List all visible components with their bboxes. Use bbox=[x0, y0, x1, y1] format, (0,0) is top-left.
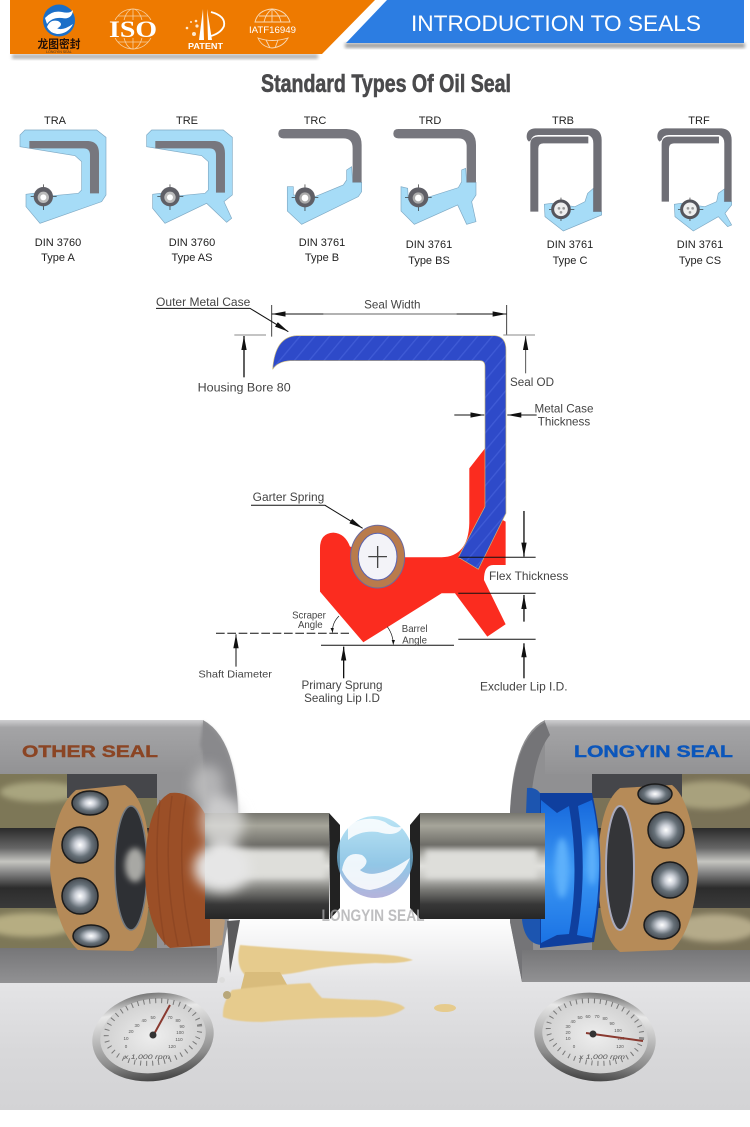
gauge: Longyin seal: 10 bbox=[565, 1036, 571, 1041]
diagram labels bbox=[156, 296, 593, 705]
gauge: other seal: 0 bbox=[125, 1044, 128, 1049]
gauge: other seal: 70 bbox=[167, 1015, 173, 1020]
gauge: Longyin seal: 80 bbox=[602, 1016, 608, 1021]
gauge: other seal: x 1,000 rpm bbox=[123, 1054, 171, 1061]
diagram labels: Primary Sprung bbox=[301, 679, 382, 692]
diagram labels: Excluder Lip I.D. bbox=[480, 681, 568, 694]
seal types row bbox=[20, 115, 732, 267]
gauge: other seal: 110 bbox=[175, 1037, 183, 1042]
icon: Longyin logo: LONGYIN SEAL bbox=[46, 50, 72, 54]
icon: IATF16949: IATF16949 bbox=[249, 25, 296, 36]
seal: TRC: Type B bbox=[305, 252, 339, 264]
oil leak bbox=[219, 920, 456, 1022]
gauge: Longyin seal: 110 bbox=[617, 1036, 625, 1041]
diagram labels: Sealing Lip I.D bbox=[304, 692, 380, 705]
diagram labels: Outer Metal Case bbox=[156, 296, 250, 309]
gauge: Longyin seal: 20 bbox=[565, 1030, 571, 1035]
gauge: Longyin seal: 0 bbox=[573, 1044, 576, 1049]
panel: other seal housing bbox=[0, 720, 238, 983]
seal: TRC: DIN 3761 bbox=[299, 237, 345, 249]
seal: TRB: Type C bbox=[553, 255, 587, 267]
shaft: other seal bbox=[205, 813, 340, 919]
seal: TRA: Type A bbox=[41, 252, 75, 264]
gauge: Longyin seal: 40 bbox=[570, 1019, 576, 1024]
gauge: Longyin seal: 70 bbox=[594, 1014, 600, 1019]
gauge: other seal: 40 bbox=[141, 1018, 147, 1023]
diagram labels: Angle bbox=[298, 620, 323, 631]
watermark logo: LONGYIN SEAL bbox=[322, 906, 424, 925]
seal: TRF bbox=[657, 115, 732, 267]
seal: TRC bbox=[278, 115, 362, 264]
floor bbox=[0, 915, 750, 1110]
diagram labels: Seal OD bbox=[510, 376, 554, 389]
gauge: other seal: 10 bbox=[123, 1036, 129, 1041]
header banner bbox=[10, 0, 745, 59]
diagram labels: Metal Case bbox=[534, 403, 593, 416]
Longyin seal bearing bbox=[598, 784, 698, 952]
gauge: Longyin seal: 60 bbox=[585, 1014, 591, 1019]
rubber body bbox=[320, 448, 506, 642]
worn seal bbox=[145, 793, 225, 948]
gauge: other seal: 90 bbox=[179, 1024, 185, 1029]
shaft: Longyin seal bbox=[410, 813, 545, 919]
orange certification band bbox=[10, 0, 375, 54]
icon: ISO bbox=[107, 9, 159, 49]
seal: TRD: TRD bbox=[419, 115, 441, 127]
garter spring bbox=[351, 525, 405, 588]
watermark logo bbox=[322, 816, 424, 925]
gauge: other seal bbox=[86, 985, 220, 1089]
outer metal case bbox=[273, 336, 506, 569]
banner title: INTRODUCTION TO SEALS bbox=[411, 11, 701, 36]
icon: IATF16949 bbox=[249, 9, 296, 48]
label: Longyin seal: LONGYIN SEAL bbox=[574, 742, 733, 761]
gauge: Longyin seal: 50 bbox=[577, 1015, 583, 1020]
seal: TRF: DIN 3761 bbox=[677, 239, 723, 251]
icon: Longyin logo bbox=[38, 4, 81, 54]
seal: TRE bbox=[147, 115, 232, 264]
gauge: Longyin seal: 90 bbox=[609, 1021, 615, 1026]
diagram labels: Garter Spring bbox=[253, 491, 324, 504]
gauge: Longyin seal bbox=[528, 985, 662, 1089]
seal: TRD: DIN 3761 bbox=[406, 239, 452, 251]
seal: TRE: TRE bbox=[176, 115, 198, 127]
icon: patent bbox=[186, 9, 224, 51]
diagram labels: Shaft Diameter bbox=[198, 670, 273, 681]
gauge: other seal: 30 bbox=[134, 1023, 140, 1028]
seal: TRA bbox=[20, 115, 106, 264]
gauge: other seal: 50 bbox=[150, 1015, 156, 1020]
seal: TRA: DIN 3760 bbox=[35, 237, 81, 249]
seal: TRB: TRB bbox=[552, 115, 574, 127]
seal cross-section diagram bbox=[156, 296, 593, 705]
diagram labels: Thickness bbox=[538, 416, 590, 429]
seal comparison photo bbox=[0, 720, 750, 1110]
other seal bearing bbox=[50, 785, 150, 951]
seal: TRE: Type AS bbox=[172, 252, 212, 264]
diagram labels: Angle bbox=[402, 635, 427, 646]
seal: TRA: TRA bbox=[44, 115, 67, 127]
section heading: Standard Types Of Oil Seal bbox=[261, 70, 511, 98]
diagram labels: Barrel bbox=[402, 624, 428, 635]
seal: TRB bbox=[527, 115, 602, 267]
blue title band bbox=[346, 0, 744, 43]
seal: TRF: TRF bbox=[688, 115, 710, 127]
seal: TRF: Type CS bbox=[679, 255, 721, 267]
gauge: other seal: 120 bbox=[168, 1044, 176, 1049]
seal: TRD: Type BS bbox=[408, 255, 450, 267]
dimension lines bbox=[156, 305, 537, 678]
label: other seal: OTHER SEAL bbox=[22, 742, 158, 761]
icon: ISO: ISO bbox=[109, 17, 157, 42]
diagram labels: Flex Thickness bbox=[489, 570, 568, 583]
icon: Longyin logo: 龙图密封 bbox=[38, 37, 81, 51]
gauge: Longyin seal: 120 bbox=[616, 1044, 624, 1049]
icon: patent: PATENT bbox=[188, 41, 224, 51]
gauge: Longyin seal: 100 bbox=[614, 1028, 622, 1033]
panel: Longyin seal housing bbox=[510, 720, 750, 982]
seal: TRE: DIN 3760 bbox=[169, 237, 215, 249]
smoke bbox=[192, 765, 250, 892]
diagram labels: Seal Width bbox=[364, 299, 421, 312]
diagram labels: Housing Bore 80 bbox=[198, 381, 291, 395]
seal: TRB: DIN 3761 bbox=[547, 239, 593, 251]
blue seal bbox=[540, 793, 601, 948]
gauge: Longyin seal: x 1,000 rpm bbox=[578, 1054, 626, 1061]
gauge: other seal: 80 bbox=[175, 1018, 181, 1023]
gauge: other seal: 20 bbox=[128, 1029, 134, 1034]
gauge: other seal: 100 bbox=[176, 1030, 184, 1035]
seal: TRC: TRC bbox=[304, 115, 326, 127]
diagram labels: Scraper bbox=[292, 610, 327, 621]
seal: TRD bbox=[393, 115, 476, 267]
gauge: Longyin seal: 30 bbox=[565, 1024, 571, 1029]
